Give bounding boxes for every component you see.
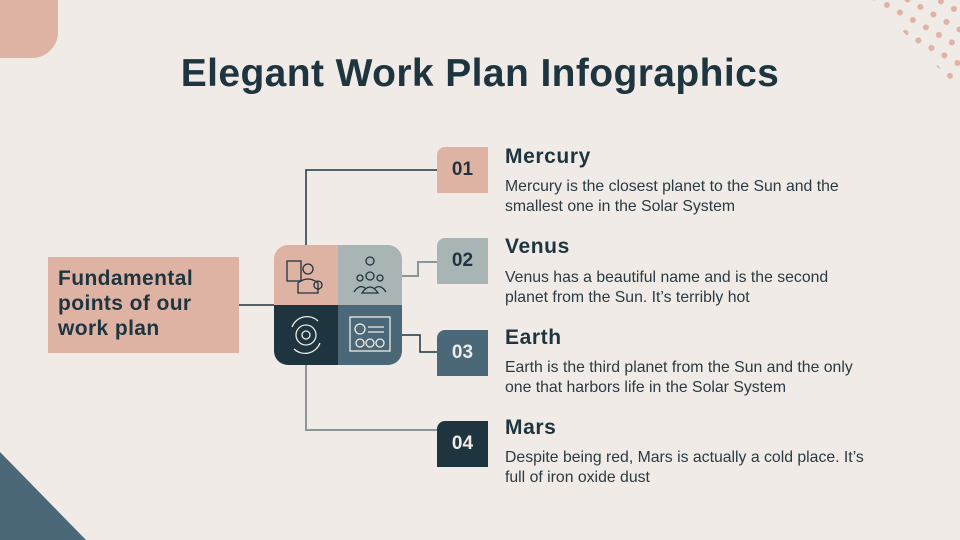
left label box (48, 257, 239, 353)
icon: presentation (338, 305, 402, 365)
decoration: top-left corner shape (0, 0, 58, 58)
icon: checklist person (274, 245, 338, 305)
icon: gear cycle (274, 305, 338, 365)
item 01 (437, 145, 839, 215)
title: Elegant Work Plan Infographics (181, 52, 779, 95)
left label box: Fundamental points of our work plan (58, 267, 193, 340)
item 03 (437, 326, 853, 396)
text: 03 (452, 342, 473, 363)
text: Mercury (505, 145, 591, 168)
icon: team gear (338, 245, 402, 305)
icon grid (274, 245, 402, 365)
text: Despite being red, Mars is actually a cold place. It’s full of iron oxide dust (505, 449, 864, 486)
text: Venus has a beautiful name and is the second planet from the Sun. It’s terribly hot (505, 269, 828, 306)
text: 02 (452, 250, 473, 271)
text: Mars (505, 416, 556, 439)
text: Earth (505, 326, 562, 349)
text: Earth is the third planet from the Sun and the only one that harbors life in the Solar System (505, 359, 853, 396)
decoration: dot pattern (872, 0, 960, 84)
decoration: bottom-left triangle (0, 452, 86, 540)
text: Venus (505, 235, 570, 258)
text: Mercury is the closest planet to the Sun and the smallest one in the Solar System (505, 178, 839, 215)
text: 01 (452, 159, 473, 180)
text: 04 (452, 433, 473, 454)
item 04 (437, 416, 864, 486)
item 02 (437, 235, 828, 306)
